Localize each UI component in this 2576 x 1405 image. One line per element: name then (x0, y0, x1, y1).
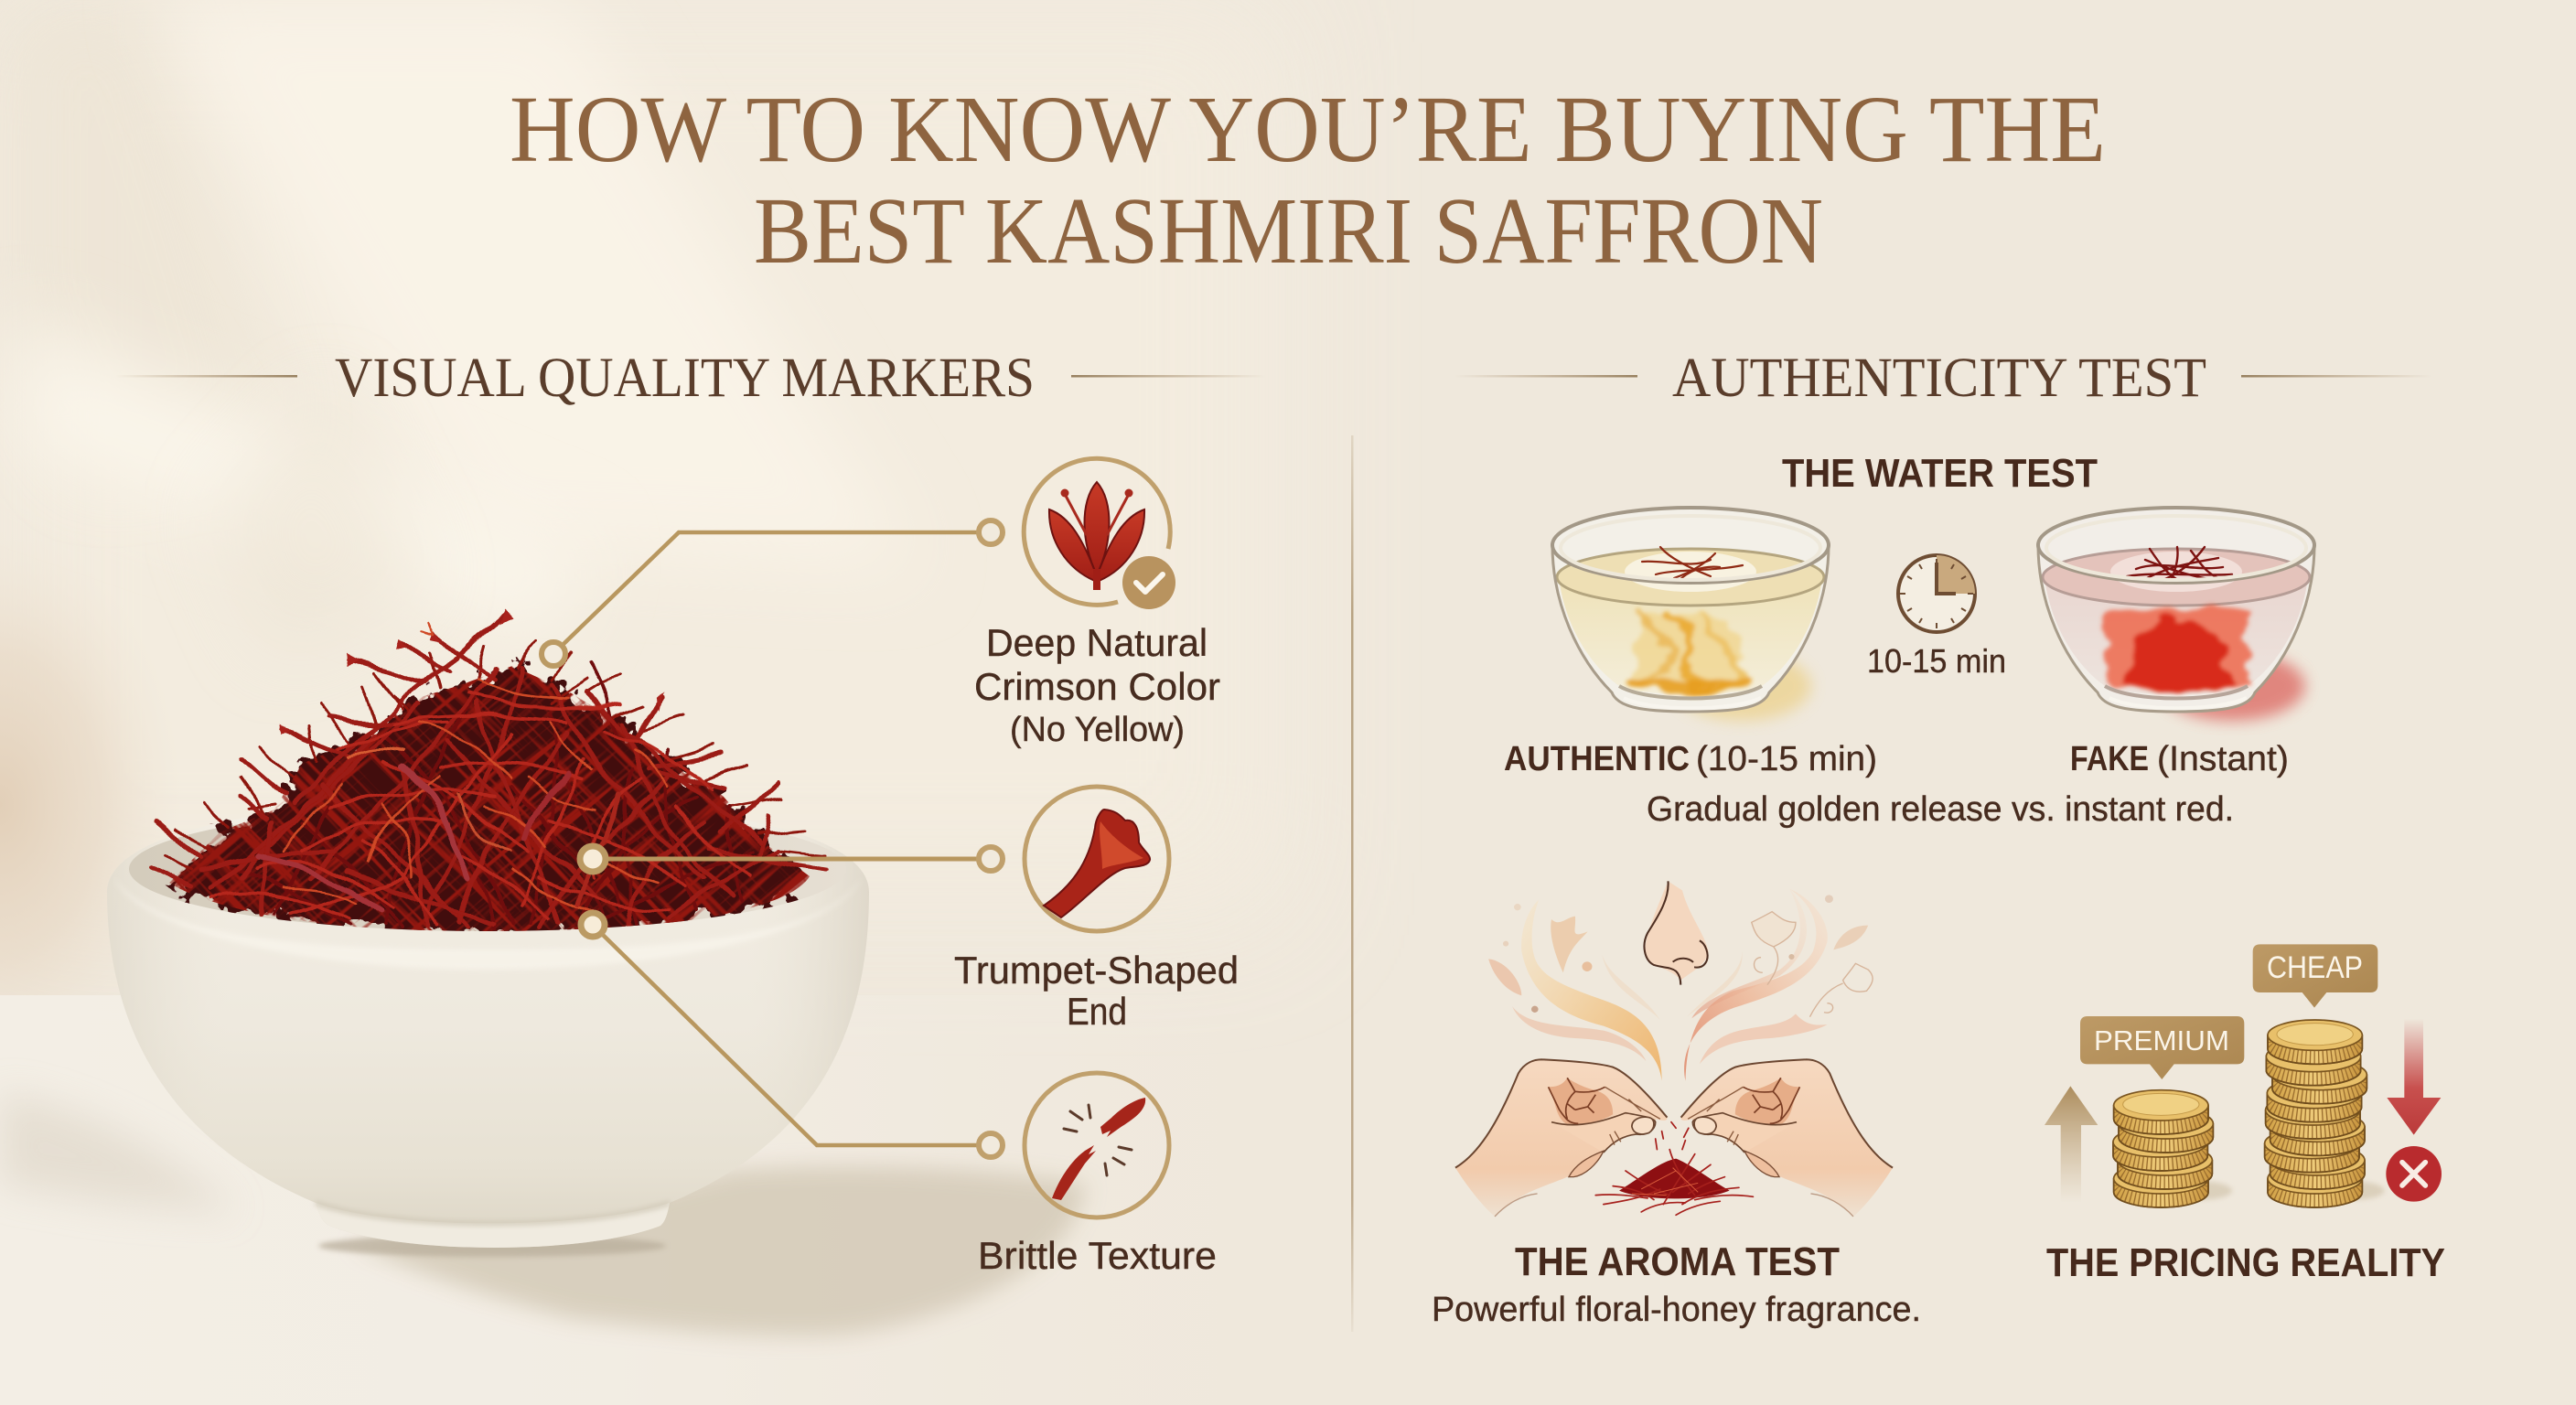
heading: authenticity test: AUTHENTICITY TEST (1672, 348, 2206, 409)
pricing label: THE PRICING REALITY (2046, 1240, 2445, 1285)
water test caption: Gradual golden release vs. instant red. (1647, 790, 2234, 829)
time label: 10-15 min (1867, 642, 2006, 680)
title: HOW TO KNOW YOU’RE BUYING THE (510, 77, 2106, 182)
icon: clock (1898, 555, 1975, 632)
glass: authentic (1552, 508, 1829, 721)
golden plume (1630, 611, 1746, 694)
aroma test label (1432, 1239, 1921, 1329)
arrow down (2387, 1018, 2441, 1135)
tag labels: PREMIUM (2094, 1024, 2229, 1056)
fraying edge strands (165, 640, 823, 869)
icon: saffron flower with check (1024, 458, 1175, 609)
water test labels: AUTHENTIC (1504, 740, 1690, 778)
nose (1644, 881, 1709, 985)
hands (1455, 1059, 1893, 1217)
bowl body (107, 800, 869, 1248)
premium tag (2080, 1016, 2244, 1079)
pricing illustration (2045, 944, 2442, 1207)
title (510, 77, 2106, 284)
red plume (2103, 609, 2249, 693)
icon: red x (2386, 1146, 2442, 1202)
water test heading: THE WATER TEST (1782, 451, 2098, 496)
table surface and bowl shadow (0, 995, 1372, 1405)
heading: visual quality markers: VISUAL QUALITY MARKERS (335, 348, 1035, 409)
trumpet tips (281, 609, 668, 733)
icon: snapped strand (1025, 1073, 1169, 1217)
label: Trumpet-Shaped (954, 949, 1239, 992)
water test labels: (10-15 min) (1696, 740, 1877, 778)
glass: fake (2038, 508, 2314, 721)
marker: trumpet-shaped end (954, 787, 1239, 1033)
label: End (1067, 990, 1127, 1033)
tag labels (2094, 950, 2363, 1056)
aroma test label: THE AROMA TEST (1515, 1239, 1840, 1284)
floating saffron threads (1642, 547, 1743, 581)
aroma test label: Powerful floral-honey fragrance. (1432, 1291, 1921, 1329)
callout lines (542, 520, 1003, 1157)
saffron bowl photo (107, 609, 869, 1248)
label: Brittle Texture (978, 1234, 1217, 1277)
water test labels: (Instant) (2157, 740, 2289, 778)
label: Crimson Color (974, 665, 1220, 708)
marker: brittle texture (978, 1073, 1217, 1277)
label: Deep Natural (986, 621, 1208, 664)
icon: trumpet stigma (1025, 787, 1169, 931)
marker: deep natural crimson color (974, 458, 1220, 749)
tag labels: CHEAP (2267, 950, 2363, 985)
coin shadows (2171, 1182, 2385, 1200)
aroma test illustration (1455, 881, 1893, 1217)
arrow up (2045, 1086, 2098, 1203)
water test labels (1504, 740, 2289, 778)
cheap tag (2253, 944, 2377, 1008)
saffron pile (149, 609, 829, 931)
label: (No Yellow) (1010, 711, 1185, 749)
water test labels: FAKE (2070, 740, 2149, 778)
saffron pinch pile (1595, 1122, 1753, 1215)
label (974, 621, 1220, 749)
label (954, 949, 1239, 1033)
title: BEST KASHMIRI SAFFRON (754, 178, 1823, 284)
premium coins (2113, 1090, 2213, 1207)
cheap coins (2265, 1020, 2367, 1207)
floating saffron threads (2127, 547, 2232, 582)
aroma swirls (1488, 889, 1873, 1081)
